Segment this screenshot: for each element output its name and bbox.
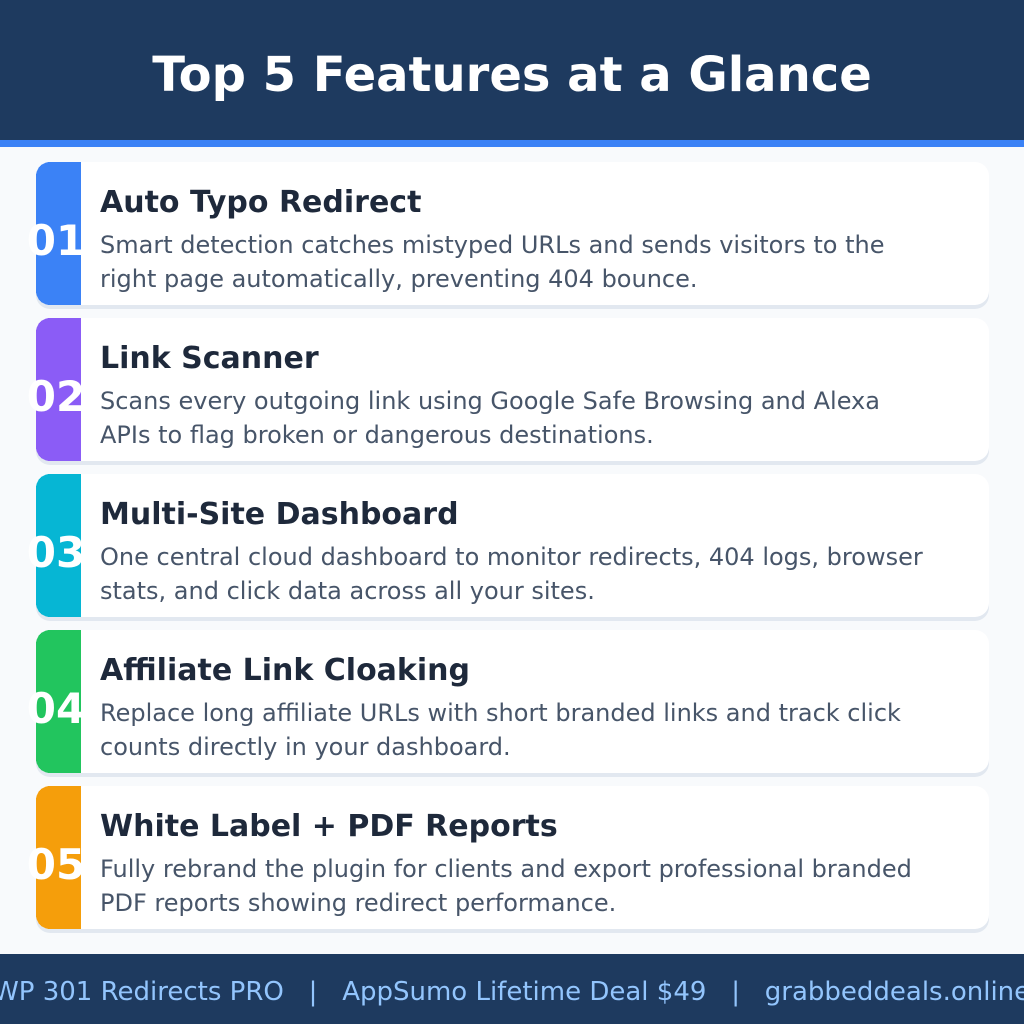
description 04: counts directly in your dashboard. [100,733,511,761]
heading: Link Scanner: Link Scanner [100,341,319,376]
description 04 [100,699,901,761]
number badge 05 [27,786,85,929]
number badge 05: 05 [27,840,85,889]
description 01: Smart detection catches mistyped URLs and sends visitors to the [100,231,884,259]
number badge 01 [27,162,85,305]
description 05 [100,855,912,917]
description 04: Replace long affiliate URLs with short branded links and track click [100,699,901,727]
footer bar [0,954,1024,1024]
description 05: PDF reports showing redirect performance. [100,889,616,917]
title: Top 5 Features at a Glance [152,47,872,103]
number badge 04: 04 [27,684,85,733]
panel: feature 03 [27,474,989,621]
description 03: One central cloud dashboard to monitor redirects, 404 logs, browser [100,543,923,571]
description 02: APIs to flag broken or dangerous destinations. [100,421,654,449]
description 03: stats, and click data across all your sites. [100,577,595,605]
description 05: Fully rebrand the plugin for clients and export professional branded [100,855,912,883]
heading: Affiliate Link Cloaking: Affiliate Link Cloaking [100,653,470,688]
number badge 04 [27,630,85,773]
description 02 [100,387,880,449]
heading: Multi-Site Dashboard: Multi-Site Dashboard [100,497,459,532]
number badge 03: 03 [27,528,85,577]
number badge 03 [27,474,85,617]
heading: White Label + PDF Reports: White Label + PDF Reports [100,809,558,844]
header banner [0,0,1024,147]
panel: feature 02 [27,318,989,465]
number badge 01: 01 [27,216,85,265]
description 01 [100,231,884,293]
panel: feature 05 [27,786,989,933]
description 03 [100,543,923,605]
description 02: Scans every outgoing link using Google Safe Browsing and Alexa [100,387,880,415]
panel: feature 04 [27,630,989,777]
description 01: right page automatically, preventing 404 bounce. [100,265,698,293]
footer text: WP 301 Redirects PRO | AppSumo Lifetime Deal $49 | grabbeddeals.online [0,977,1024,1007]
number badge 02 [27,318,85,461]
panel: feature 01 [27,162,989,309]
heading: Auto Typo Redirect: Auto Typo Redirect [100,185,421,220]
number badge 02: 02 [27,372,85,421]
